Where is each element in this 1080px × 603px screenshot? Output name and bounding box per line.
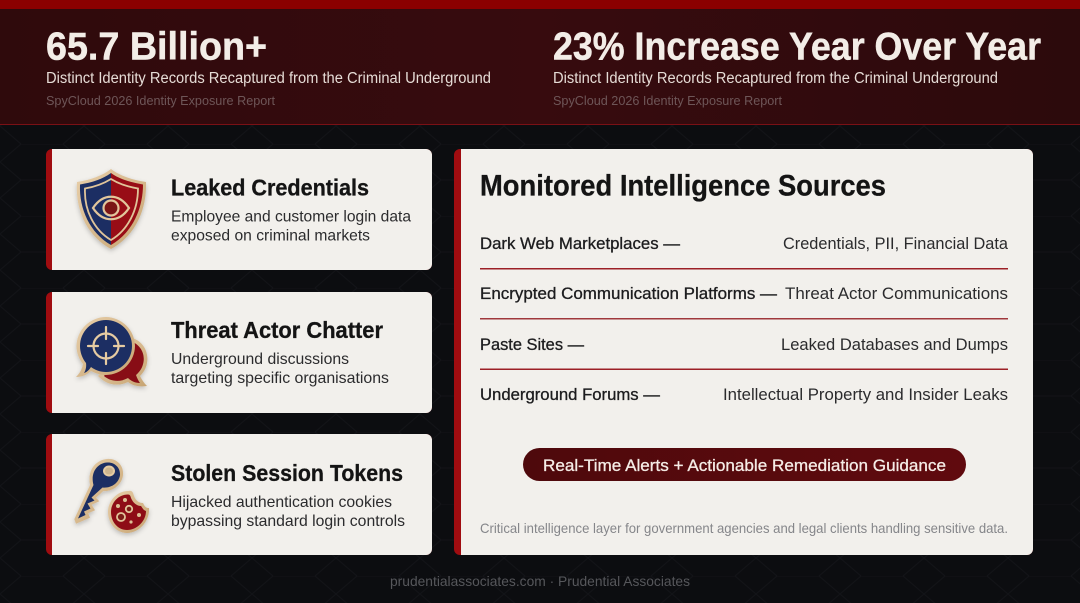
stat: 23 percent increase: [553, 26, 1041, 108]
stat: 65.7 billion: [46, 26, 491, 108]
description: Employee and customer login data: [171, 208, 411, 226]
stat: 65.7 billion: 65.7 Billion+: [46, 26, 267, 68]
description: Hijacked authentication cookies: [171, 494, 392, 511]
source row: paste sites: [480, 336, 1008, 354]
heading: Threat Actor Chatter: [171, 317, 383, 343]
description: [171, 494, 405, 530]
description: [171, 208, 411, 244]
icon: chat bubbles with crosshair: [76, 317, 147, 386]
stat: 65.7 billion: Distinct Identity Records Recaptured from the Criminal Underground: [46, 70, 491, 87]
source row: dark web: [480, 235, 1009, 253]
callout pill: [523, 448, 966, 481]
heading: Monitored Intelligence Sources: [480, 170, 886, 202]
icon: key: [74, 459, 123, 524]
source row: dark web: Dark Web Marketplaces —: [480, 235, 681, 253]
source row: encrypted platforms: [480, 285, 1008, 303]
source row: dark web: Credentials, PII, Financial Data: [783, 235, 1009, 253]
stat: 23 percent increase: Distinct Identity Records Recaptured from the Criminal Underground: [553, 70, 998, 87]
heading: Stolen Session Tokens: [171, 460, 403, 486]
source row: underground forums: [480, 386, 1008, 404]
panel: stolen session tokens: [46, 434, 432, 555]
callout pill: Real-Time Alerts + Actionable Remediation Guidance: [543, 456, 946, 475]
source row: paste sites: Leaked Databases and Dumps: [781, 336, 1008, 354]
heading: Leaked Credentials: [171, 174, 369, 200]
icon: cookie: [108, 491, 149, 533]
stat: 65.7 billion: SpyCloud 2026 Identity Exposure Report: [46, 93, 275, 108]
description: bypassing standard login controls: [171, 513, 405, 530]
top accent bar: [0, 0, 1080, 9]
panel: monitored intelligence sources: [454, 149, 1033, 555]
panel: leaked credentials: [46, 149, 432, 270]
description: exposed on criminal markets: [171, 228, 370, 244]
stat: 23 percent increase: 23% Increase Year Over Year: [553, 26, 1041, 68]
icon: shield with eye: [77, 169, 146, 249]
source row: underground forums: Underground Forums —: [480, 386, 660, 404]
stat: 23 percent increase: SpyCloud 2026 Identity Exposure Report: [553, 93, 782, 108]
description: [171, 351, 389, 387]
source row: paste sites: Paste Sites —: [480, 336, 584, 354]
source row: encrypted platforms: Threat Actor Communications: [785, 285, 1008, 303]
description: targeting specific organisations: [171, 370, 389, 387]
source row: underground forums: Intellectual Property and Insider Leaks: [723, 386, 1008, 404]
panel: threat actor chatter: [46, 292, 432, 413]
footnote: Critical intelligence layer for government agencies and legal clients handling sensitive data.: [480, 520, 1008, 536]
description: Underground discussions: [171, 351, 349, 368]
source row: encrypted platforms: Encrypted Communication Platforms —: [480, 285, 778, 303]
footer: prudentialassociates.com · Prudential Associates: [390, 573, 690, 589]
header band: [0, 9, 1080, 125]
